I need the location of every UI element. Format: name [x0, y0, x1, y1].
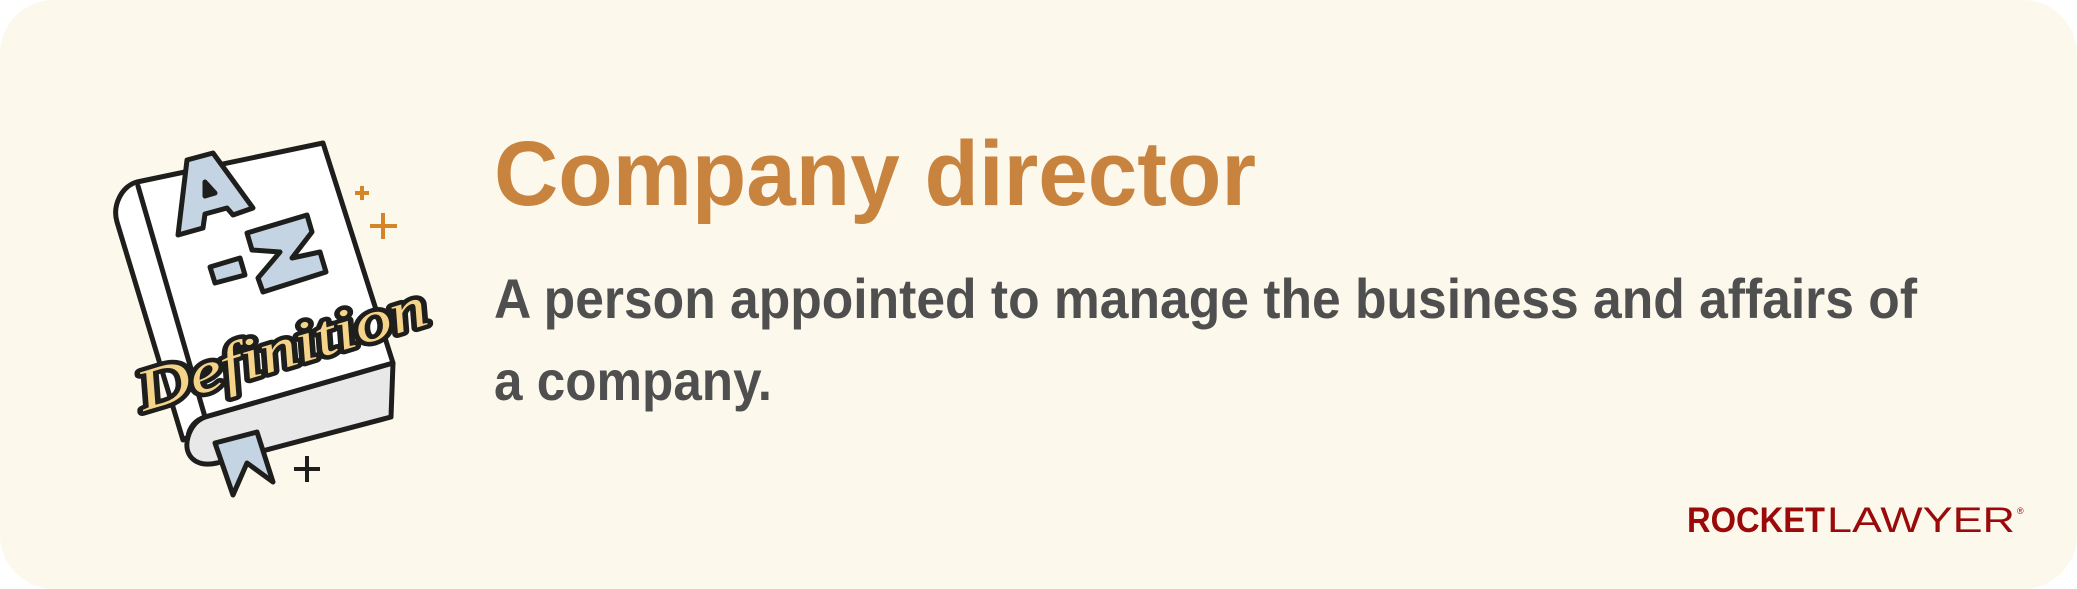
letter Z: [247, 215, 326, 292]
icon: definition book: [116, 143, 393, 495]
title: Company director: [494, 123, 1256, 225]
sparkles: [355, 186, 397, 239]
book cover: [116, 143, 393, 440]
book pages: [187, 363, 393, 464]
definition text: [494, 267, 1917, 412]
logo: Rocket Lawyer: ROCKET: [1687, 501, 1825, 540]
definition text: A person appointed to manage the business and affairs of: [494, 267, 1917, 330]
bookmark: [215, 432, 273, 495]
spine line: [138, 186, 205, 417]
logo: Rocket Lawyer: ®: [2017, 506, 2024, 516]
dash: [210, 258, 245, 283]
letter A: [178, 153, 253, 235]
logo: Rocket Lawyer: LAWYER: [1827, 501, 2015, 540]
logo: Rocket Lawyer: [1687, 501, 2024, 540]
definition text: a company.: [494, 349, 772, 412]
definition label: Definition: [127, 274, 435, 424]
